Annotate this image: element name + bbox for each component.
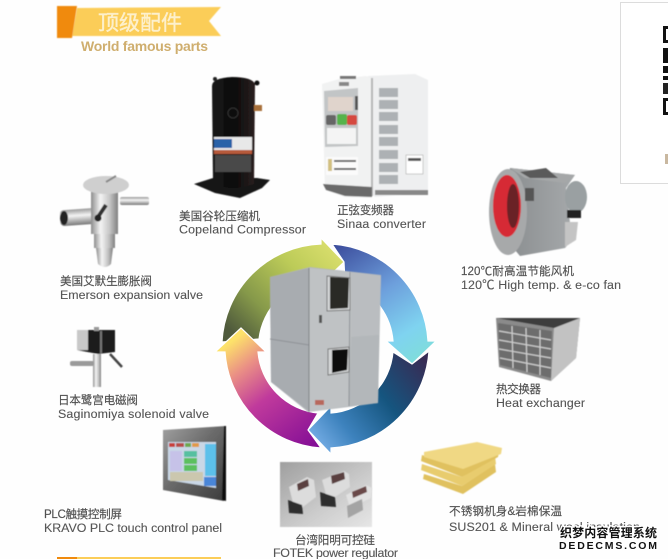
icon: power regulator xyxy=(280,462,372,527)
heading banner: 顶级配件 xyxy=(98,12,182,35)
label: fan: 120℃耐高温节能风机 xyxy=(461,264,574,278)
label: compressor xyxy=(179,209,306,236)
label: power regulator xyxy=(273,533,398,559)
QR code panel xyxy=(620,2,668,184)
watermark: 织梦内容管理系统 xyxy=(560,525,657,540)
subtitle: World famous parts xyxy=(81,38,208,54)
label: PLC touch panel: KRAVO PLC touch control panel xyxy=(44,521,222,535)
icon: fan xyxy=(489,168,587,256)
icon: PLC touch panel xyxy=(163,426,226,501)
label: mineral wool xyxy=(449,504,640,534)
label: solenoid valve: 日本鹭宫电磁阀 xyxy=(58,393,138,407)
label: solenoid valve xyxy=(58,393,209,421)
label: PLC touch panel: PLC触摸控制屏 xyxy=(44,507,122,521)
label: inverter: Sinaa converter xyxy=(337,217,426,231)
label: solenoid valve: Saginomiya solenoid valve xyxy=(58,407,209,421)
label: expansion valve xyxy=(60,274,203,302)
watermark: DEDECMS.COM xyxy=(559,540,657,552)
label: compressor: Copeland Compressor xyxy=(179,222,306,236)
watermark xyxy=(559,525,657,552)
icon: expansion valve xyxy=(59,176,149,267)
label: inverter: 正弦变频器 xyxy=(337,203,394,217)
cycle arrows ring xyxy=(215,238,436,454)
label: fan: 120℃ High temp. & e-co fan xyxy=(461,278,621,292)
central machine unit xyxy=(270,267,381,412)
icon: heat exchanger xyxy=(496,318,580,381)
icon: inverter xyxy=(322,74,428,198)
label: heat exchanger: Heat exchanger xyxy=(496,396,585,410)
label: compressor: 美国谷轮压缩机 xyxy=(179,209,260,223)
arrow: purple to yellow xyxy=(215,328,321,448)
arrow: navy to blue xyxy=(308,351,429,454)
label: inverter xyxy=(337,203,426,231)
label: mineral wool: 不锈钢机身&岩棉保温 xyxy=(449,504,562,518)
heading banner xyxy=(57,6,221,38)
arrow: blue to cyan xyxy=(332,244,436,364)
arrow: olive to lime xyxy=(222,238,344,342)
label: fan xyxy=(461,264,621,292)
label: expansion valve: Emerson expansion valve xyxy=(60,288,203,302)
next section banner edge xyxy=(57,557,221,559)
label: mineral wool: SUS201 & Mineral wool insulation xyxy=(449,520,640,534)
label: heat exchanger xyxy=(496,382,585,410)
label: expansion valve: 美国艾默生膨胀阀 xyxy=(60,274,152,288)
icon: solenoid valve xyxy=(70,327,122,387)
label: PLC touch panel xyxy=(44,507,222,535)
label: power regulator: 台湾阳明可控硅 xyxy=(295,533,375,547)
icon: mineral wool slabs xyxy=(421,442,502,494)
label: heat exchanger: 热交换器 xyxy=(496,382,541,396)
icon: compressor xyxy=(194,77,270,198)
